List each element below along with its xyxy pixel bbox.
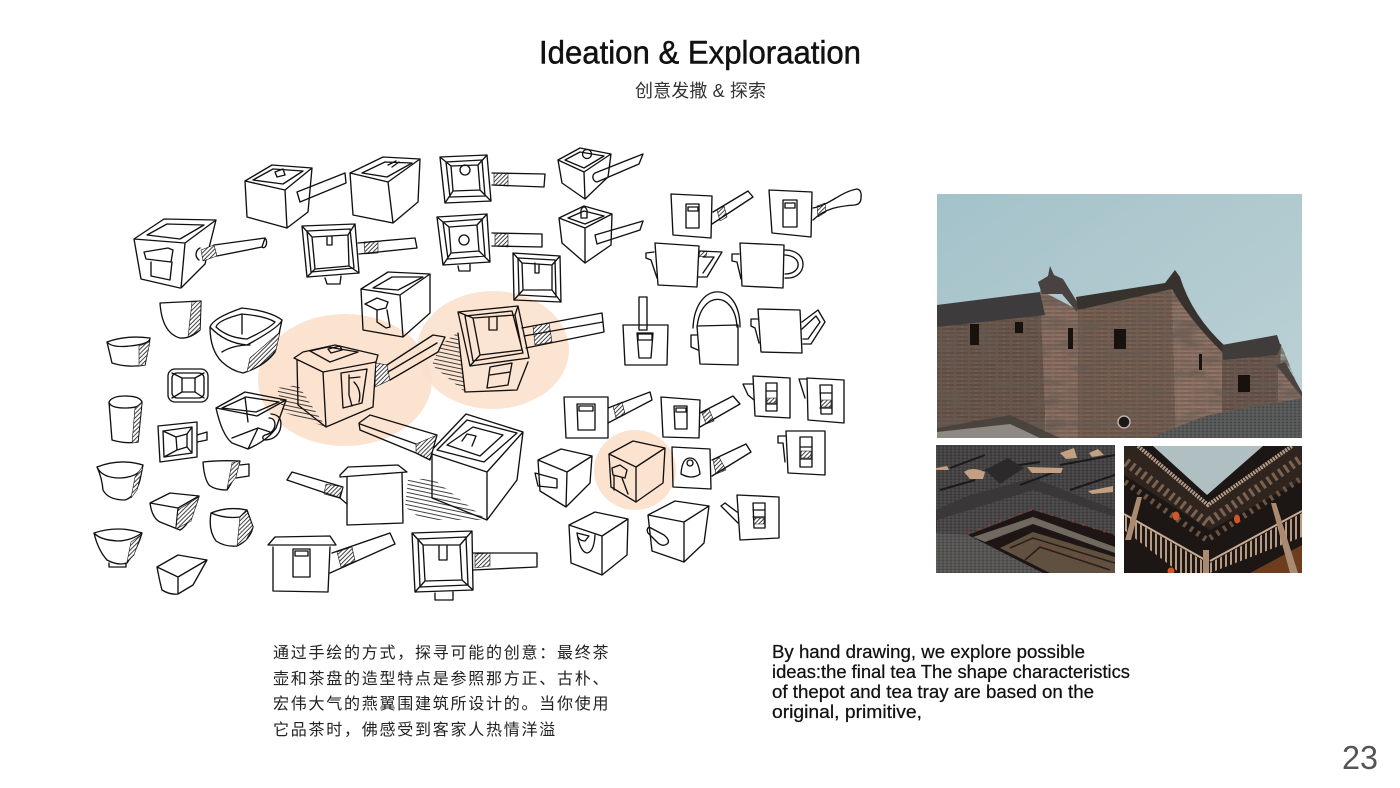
- sketch: window pot bottom right: [721, 495, 779, 540]
- text block: Chinese description: [273, 643, 610, 739]
- sketch: side square pot 2: [661, 396, 740, 438]
- sketch: low bowl: [150, 493, 199, 530]
- sketch: square top view: [513, 253, 561, 302]
- sketch: window pot X: [799, 378, 844, 423]
- title: Ideation & Exploraation: [539, 34, 861, 70]
- text block: English description: ideas:the final tea The shape characteristics: [772, 661, 1130, 682]
- highlight: peach circle left: [258, 314, 432, 446]
- photo: earth building exterior: [937, 194, 1302, 438]
- sketch: window pot Y: [778, 431, 825, 475]
- sketch: front view pot bottom: [412, 531, 537, 600]
- text block: Chinese description: 它品茶时，佛感受到客家人热情洋溢: [273, 721, 557, 739]
- sketch: cube with loop: [569, 512, 628, 575]
- sketch: front view pot round lid: [440, 155, 545, 203]
- sketch: highlighted main pot left: [277, 335, 445, 427]
- sketch: front view pot with handle: [302, 224, 417, 284]
- sketch: side pot straight handle: [671, 191, 753, 238]
- text block: Chinese description: 壶和茶盘的造型特点是参照那方正、古朴、: [273, 669, 610, 688]
- sketch: cube with rounded handle: [647, 501, 709, 562]
- sketch: cup with small handle: [203, 461, 249, 490]
- sketch: large pot upper left: [134, 219, 267, 288]
- sketch: highlighted small cube: [609, 441, 665, 502]
- text block: Chinese description: 宏伟大气的燕翼围建筑所设计的。当你使用: [273, 695, 610, 713]
- sketch: barrel cup: [210, 509, 253, 546]
- sketch: small cup 1: [107, 337, 150, 366]
- highlight: peach circle right: [594, 430, 676, 510]
- sketch: cube pot with ball knob: [558, 148, 643, 199]
- subtitle: 创意发撒 & 探索: [635, 81, 766, 101]
- sketch: highlighted main pot right: [432, 306, 604, 392]
- text block: Chinese description: 通过手绘的方式，探寻可能的创意：最终茶: [273, 643, 610, 662]
- photo: tulou roofs from above: [936, 445, 1115, 573]
- text block: English description: original, primitive,: [772, 701, 922, 722]
- sketch: round cup: [97, 462, 143, 500]
- sketch: cube with handle: [245, 165, 346, 228]
- sketch: side pot curved handle: [769, 189, 861, 237]
- sketch: roofed side pot: [287, 465, 407, 525]
- sketch: square bowl bottom: [157, 555, 207, 594]
- page number: 23: [1342, 739, 1378, 776]
- sketch: cube pot with cone knob: [559, 206, 643, 263]
- sketch: teapot profile angular handle: [751, 309, 825, 353]
- sketch: small cup 2: [160, 301, 201, 338]
- sketch: box with spout: [361, 272, 430, 337]
- sketch: side square pot 1: [564, 392, 652, 438]
- sketch: bucket handle pot: [691, 292, 740, 365]
- sketch: rounded square from above: [168, 369, 208, 402]
- text block: English description: By hand drawing, we explore possible: [772, 641, 1085, 662]
- sketch: square bowl with handle: [216, 392, 286, 449]
- sketch: teapot profile arc handle: [732, 243, 803, 288]
- sketch: teapot profile trapezoid handle: [646, 243, 722, 287]
- sketch: tall cup: [109, 396, 142, 443]
- highlight: peach circle middle: [417, 291, 569, 409]
- sketches of teapots and cups: [94, 148, 861, 600]
- photo: tulou courtyard eaves: [1124, 446, 1302, 574]
- sketch: cube with side handle: [535, 449, 592, 507]
- sketch: window pot W: [743, 376, 790, 418]
- sketch: roofed side pot with window: [268, 533, 395, 592]
- sketch: front view pot round knob: [437, 214, 542, 271]
- sketch: large open pot centre: [359, 414, 523, 520]
- sketch: square cup with side handle: [158, 422, 207, 462]
- sketch: big square bowl: [210, 308, 282, 373]
- sketch: bell lid pot: [672, 444, 751, 489]
- sketch: top handle pot: [623, 297, 668, 365]
- text block: English description: of thepot and tea tray are based on the: [772, 681, 1094, 702]
- sketch: footed bowl: [94, 529, 142, 567]
- sketch: plain cube: [350, 157, 420, 223]
- text block: English description: [772, 641, 1130, 722]
